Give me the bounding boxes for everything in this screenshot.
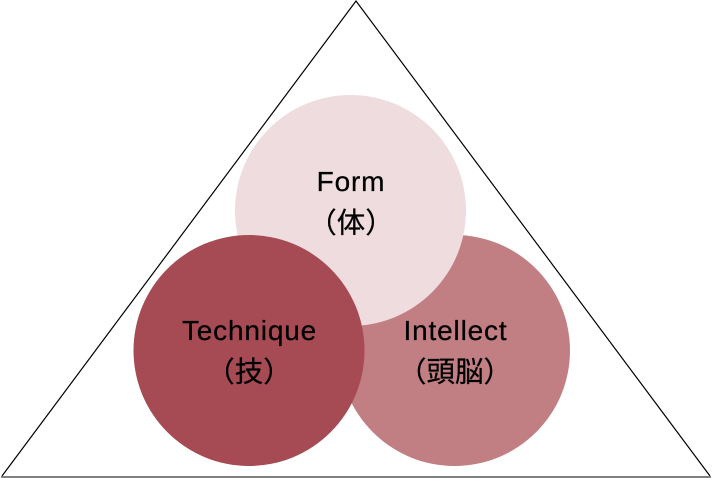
label: Technique [182, 315, 317, 388]
label: Technique: Technique [182, 315, 317, 346]
circle: Intellect [339, 235, 570, 466]
label: Intellect: Intellect [404, 315, 507, 346]
label: Technique: （技） [206, 356, 292, 388]
circle: Form [235, 95, 466, 326]
label: Form: Form [317, 166, 385, 197]
label: Form: （体） [308, 208, 394, 240]
label: Intellect: （頭脳） [398, 356, 512, 388]
label: Form [308, 166, 394, 240]
circle: Technique [134, 235, 364, 466]
label: Intellect [398, 315, 512, 388]
